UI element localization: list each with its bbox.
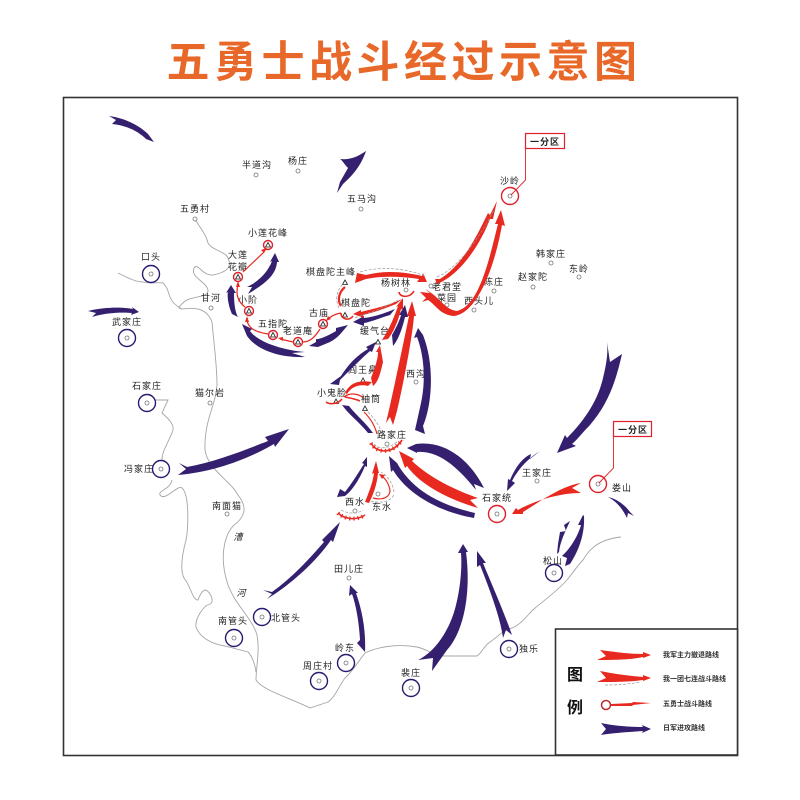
red command posts: 娄山 xyxy=(612,482,632,493)
red main retreat arrows xyxy=(345,201,581,514)
blue village rings: 周庄村 xyxy=(303,660,333,671)
thin red warrior routes xyxy=(236,248,394,502)
legend: japanese attack route xyxy=(601,723,705,735)
place names: 王家庄 xyxy=(522,467,552,478)
five warriors route positions: 老道庵 xyxy=(283,325,313,336)
red command posts xyxy=(482,175,632,522)
legend: main force retreat route: 我军主力撤退路线 xyxy=(663,650,719,659)
place names: 西头儿 xyxy=(464,296,494,306)
blue village rings xyxy=(112,252,563,696)
title: 五勇士战斗经过示意图 xyxy=(166,39,642,87)
legend: seventh company route xyxy=(597,671,726,685)
blue village rings: 口头 xyxy=(141,252,161,262)
blue village rings: 松山 xyxy=(543,555,563,566)
blue village rings: 南管头 xyxy=(218,615,248,626)
red command posts: 石家统 xyxy=(482,492,512,503)
panel: legend xyxy=(556,629,738,755)
legend: seventh company route: 我一团七连战斗路线 xyxy=(663,674,726,683)
callout: 一分区 north: 一分区 xyxy=(530,136,560,147)
map frame xyxy=(64,98,738,756)
place names: 漕 xyxy=(233,532,244,542)
place names: 河 xyxy=(236,588,247,598)
place names: 杨树林 xyxy=(381,277,411,288)
five warriors route positions: 小鬼脸 xyxy=(317,387,347,398)
place names: 韩家庄 xyxy=(536,248,566,259)
blue village rings: 北管头 xyxy=(271,612,301,623)
callout: 一分区 east xyxy=(599,422,652,483)
place names xyxy=(180,155,589,598)
blue village rings: 独乐 xyxy=(519,643,539,654)
place names: 菜园 xyxy=(437,292,457,303)
place names: 五勇村 xyxy=(180,203,210,214)
five warriors route positions xyxy=(228,227,390,410)
five warriors route positions: 棋盘陀 xyxy=(341,297,371,308)
blue village rings: 冯家庄 xyxy=(124,463,154,474)
river and roads xyxy=(118,219,621,708)
place names: 西水 xyxy=(345,496,365,507)
blue village rings: 石家庄 xyxy=(132,380,162,391)
legend: five warriors route: 五勇士战斗路线 xyxy=(663,699,712,708)
five warriors route positions: 棋盘陀主峰 xyxy=(306,266,356,277)
place names: 西沟 xyxy=(406,368,426,379)
legend heading: 图 xyxy=(567,667,583,684)
place names: 陈庄 xyxy=(484,276,504,287)
blue enemy arrows xyxy=(88,116,634,671)
battle arcs xyxy=(326,291,414,519)
legend: main force retreat route xyxy=(597,650,719,660)
five warriors route positions: 阎王鼻 xyxy=(348,364,378,375)
place names: 南面猫 xyxy=(212,500,242,511)
place names: 甘河 xyxy=(201,292,221,303)
place names: 田儿庄 xyxy=(334,563,364,574)
five warriors route positions: 缓气台 xyxy=(360,325,390,336)
callout: 一分区 east: 一分区 xyxy=(618,424,648,435)
legend heading xyxy=(567,667,583,717)
blue village rings: 武家庄 xyxy=(112,316,142,327)
five warriors route positions: 花瓣 xyxy=(228,261,248,272)
place names: 五马沟 xyxy=(347,193,377,204)
place names: 东水 xyxy=(372,501,392,512)
legend: japanese attack route: 日军进攻路线 xyxy=(663,723,705,732)
five warriors route positions: 大莲 xyxy=(228,249,248,260)
five warriors route positions: 古庙 xyxy=(309,307,329,318)
place names: 猫尔岩 xyxy=(195,387,225,398)
five warriors route positions: 小阶 xyxy=(238,294,258,305)
blue village rings: 裴庄 xyxy=(401,667,421,678)
place names: 杨庄 xyxy=(288,155,308,166)
five warriors route positions: 袖筒 xyxy=(361,393,381,404)
five warriors route positions: 五指陀 xyxy=(258,318,288,329)
legend: five warriors route xyxy=(602,699,712,710)
place names: 老君堂 xyxy=(432,281,462,292)
grey dashed companion routes xyxy=(341,210,494,513)
place names: 半道沟 xyxy=(242,159,272,170)
place names: 东岭 xyxy=(569,263,589,274)
five warriors route positions: 小莲花峰 xyxy=(248,227,288,238)
callout: 一分区 north xyxy=(511,134,564,195)
red command posts: 沙岭 xyxy=(500,175,520,186)
legend heading: 例 xyxy=(567,699,583,717)
place names: 路家庄 xyxy=(377,429,407,440)
place names: 赵家陀 xyxy=(518,271,548,282)
blue village rings: 岭东 xyxy=(335,642,355,653)
